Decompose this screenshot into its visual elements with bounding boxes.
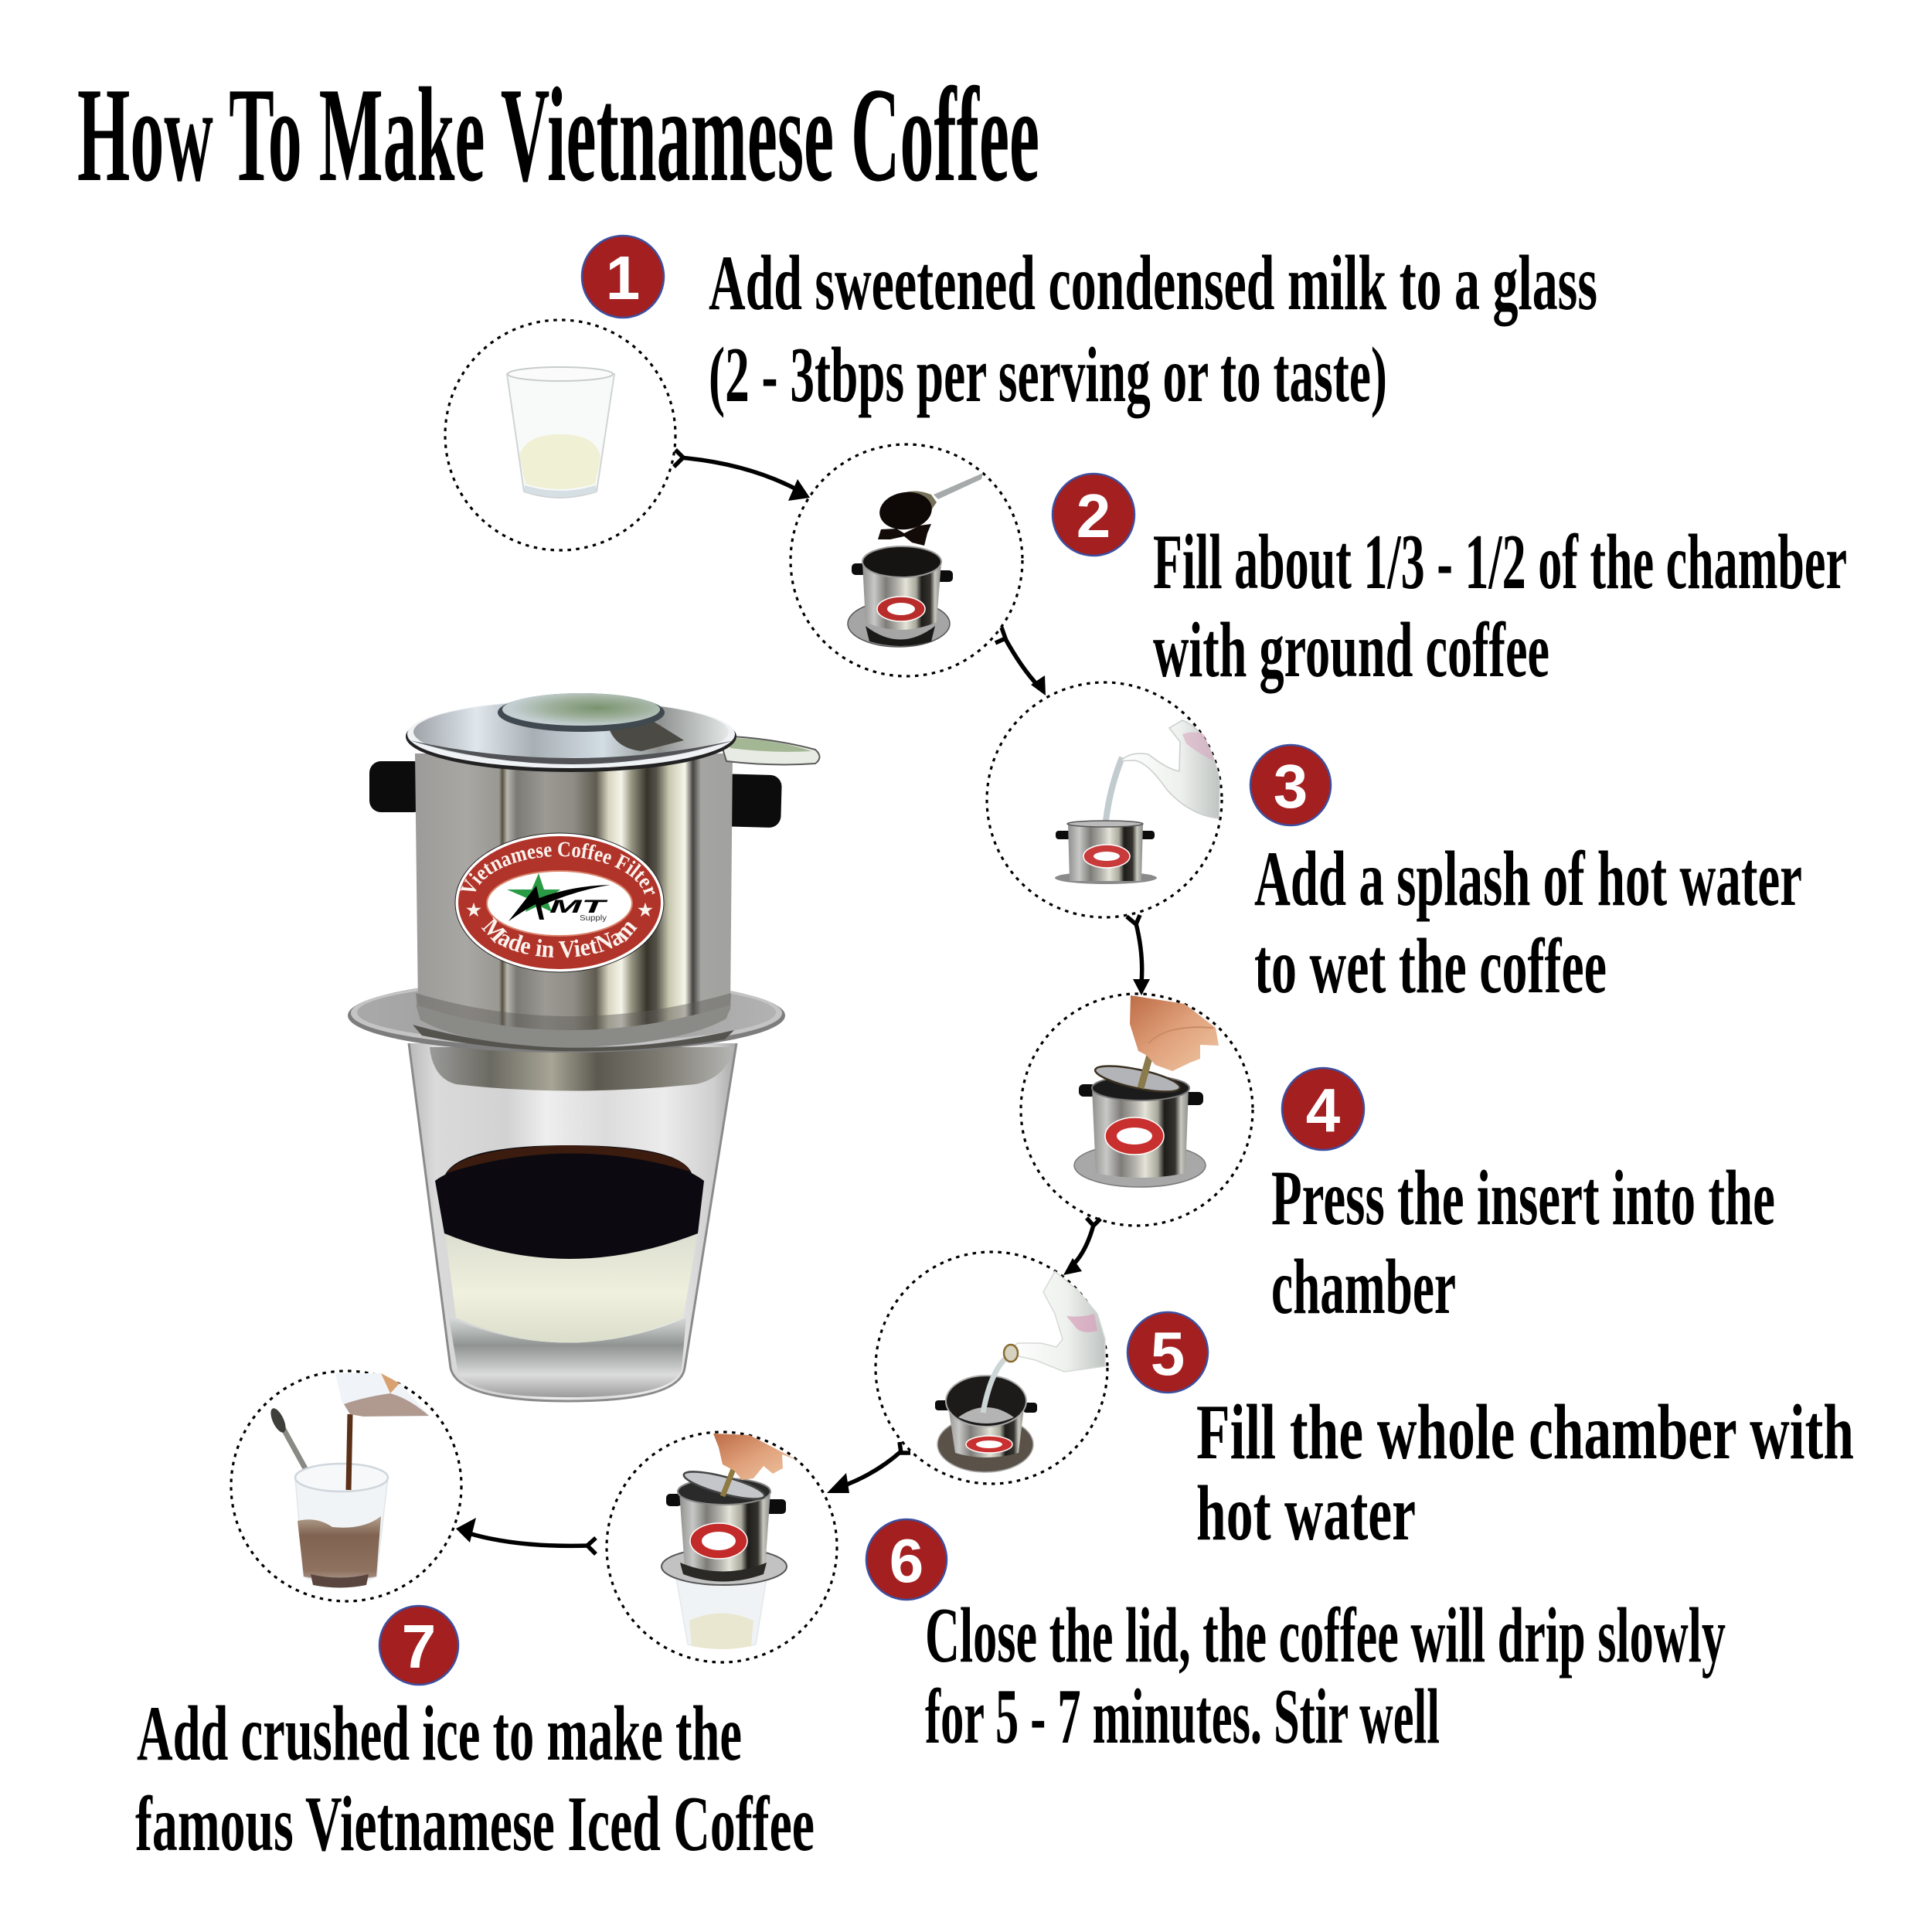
arrow 3 to 4 xyxy=(1127,915,1150,995)
step 5 badge xyxy=(1128,1312,1208,1393)
step 6 badge: 6 xyxy=(889,1526,923,1595)
sticker: Vietnamese Coffee Filter: MT xyxy=(549,896,609,917)
step 2 badge xyxy=(1053,474,1134,556)
step 1 badge xyxy=(582,236,664,318)
sticker: Vietnamese Coffee Filter: ★ xyxy=(466,900,481,920)
sticker: Vietnamese Coffee Filter: Supply xyxy=(580,914,607,923)
step 5 text: hot water xyxy=(1196,1470,1416,1557)
step 4 badge xyxy=(1282,1068,1364,1150)
plate front rim xyxy=(413,1025,734,1051)
step 5 circle: filling chamber with hot water xyxy=(876,1252,1107,1484)
milk layer xyxy=(445,1233,698,1343)
step 3 badge: 3 xyxy=(1274,752,1308,821)
step 1 text: (2 - 3tbps per serving or to taste) xyxy=(709,332,1387,419)
step 5 text xyxy=(1196,1389,1854,1557)
filter chamber xyxy=(415,753,733,1048)
step 7 circle: iced coffee xyxy=(231,1371,461,1601)
step 2 badge: 2 xyxy=(1077,481,1111,550)
sticker: Vietnamese Coffee Filter: Vietnamese Coffee Filter xyxy=(461,842,655,895)
step 4 badge: 4 xyxy=(1306,1076,1341,1145)
step 6 text xyxy=(925,1592,1726,1760)
step 1 text xyxy=(709,240,1597,419)
sticker: Vietnamese Coffee Filter: Made in VietNam xyxy=(481,917,638,958)
arrow 1 to 2 xyxy=(674,450,810,501)
step 4 circle: pressing the insert xyxy=(1021,994,1253,1226)
sticker: Vietnamese Coffee Filter: ★ xyxy=(638,900,653,920)
knob left xyxy=(369,761,425,812)
step 1 badge: 1 xyxy=(606,243,640,312)
step 5 badge: 5 xyxy=(1151,1319,1185,1388)
step 2 circle: spooning ground coffee xyxy=(791,444,1022,676)
arrow 6 to 7 xyxy=(456,1518,596,1554)
step 6 text: for 5 - 7 minutes. Stir well xyxy=(925,1673,1440,1760)
filter lid xyxy=(406,693,819,772)
step 7 badge xyxy=(379,1606,458,1685)
step 7 text: Add crushed ice to make the xyxy=(137,1690,742,1777)
arrow 2 to 3 xyxy=(995,628,1046,696)
knob right xyxy=(708,774,782,828)
filter plate xyxy=(348,978,785,1053)
step 7 text: famous Vietnamese Iced Coffee xyxy=(135,1781,815,1868)
sticker: Vietnamese Coffee Filter xyxy=(454,833,665,972)
step 4 text xyxy=(1271,1155,1775,1331)
step 3 text xyxy=(1254,835,1802,1010)
hero: Vietnamese coffee filter on glass xyxy=(348,693,821,1402)
step 4 text: chamber xyxy=(1271,1243,1456,1331)
step 3 text: to wet the coffee xyxy=(1254,923,1607,1010)
step 3 badge xyxy=(1250,745,1331,825)
coffee layer xyxy=(435,1145,704,1259)
step 2 text: with ground coffee xyxy=(1153,607,1549,694)
step 2 text xyxy=(1153,519,1847,694)
hero glass xyxy=(409,1043,736,1401)
step 7 badge: 7 xyxy=(402,1612,436,1681)
arrow 4 to 5 xyxy=(1063,1218,1100,1275)
step 3 circle: pouring a splash of water xyxy=(987,682,1222,917)
arrow 5 to 6 xyxy=(827,1442,910,1493)
step 6 circle: coffee dripping over milk xyxy=(607,1432,837,1662)
step 1 circle: glass with condensed milk xyxy=(445,320,675,550)
step 7 text xyxy=(135,1690,815,1868)
step 6 badge xyxy=(866,1519,947,1600)
